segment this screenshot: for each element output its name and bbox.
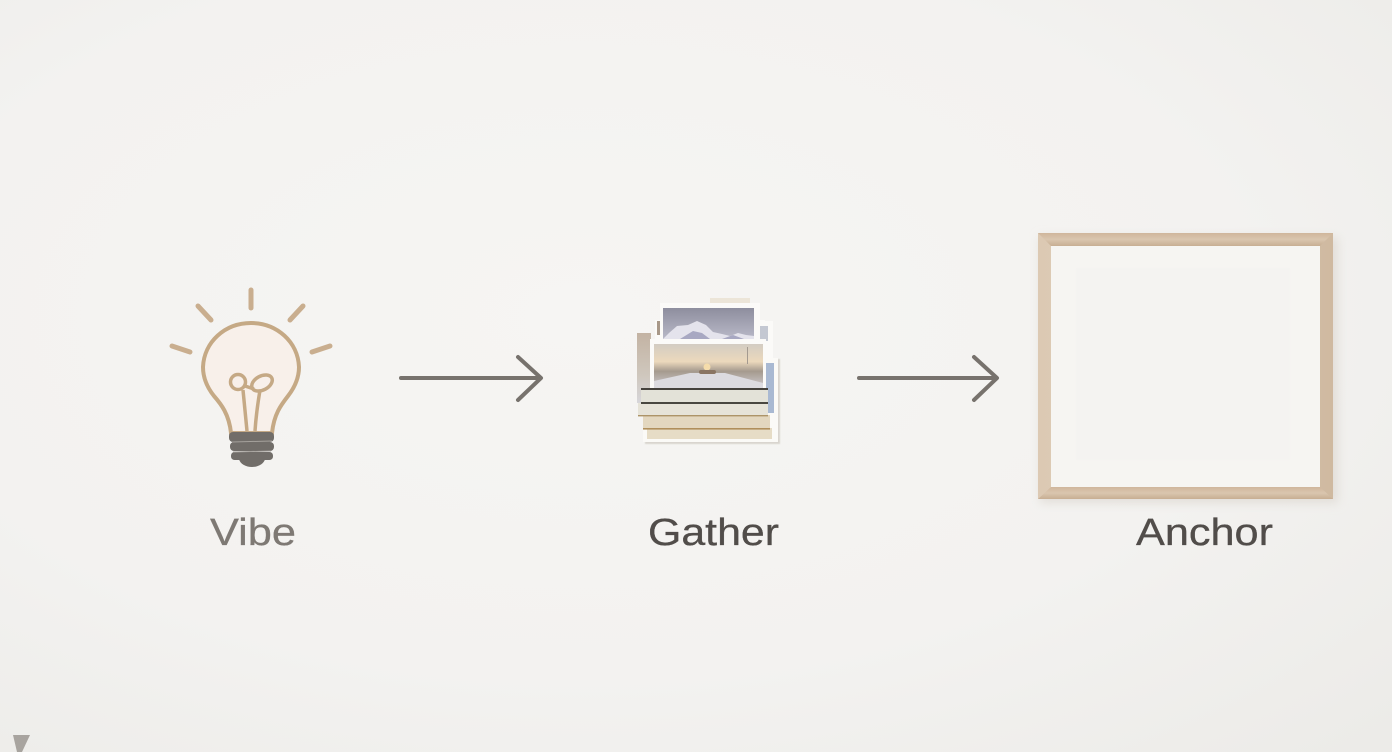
label: Anchor: Anchor: [1136, 512, 1273, 554]
label: Gather: Gather: [648, 512, 779, 554]
frame shadow: [1040, 237, 1338, 503]
top photo: mountains: [660, 303, 760, 341]
corner object fragment: [13, 735, 30, 752]
book stack: [638, 388, 772, 439]
frame wood: [1038, 233, 1333, 499]
arrow: vibe to gather: [401, 357, 541, 400]
middle photo: sunset road: [650, 339, 766, 388]
icon: stack of photos and books: [637, 298, 780, 444]
bulb glass: [203, 323, 299, 433]
base grooves: [232, 441, 272, 452]
left photo: [637, 333, 651, 403]
back photo edges: [710, 298, 750, 304]
arrow: gather to anchor: [859, 357, 997, 400]
label: Vibe: Vibe: [210, 512, 296, 554]
bulb filament: [230, 372, 275, 431]
bulb rays: [172, 290, 330, 352]
back white card: [645, 359, 780, 444]
icon: light bulb: [172, 290, 330, 467]
frame mat: [1051, 246, 1320, 487]
bulb screw base: [229, 432, 274, 467]
icon: empty wooden frame: [1038, 233, 1338, 503]
